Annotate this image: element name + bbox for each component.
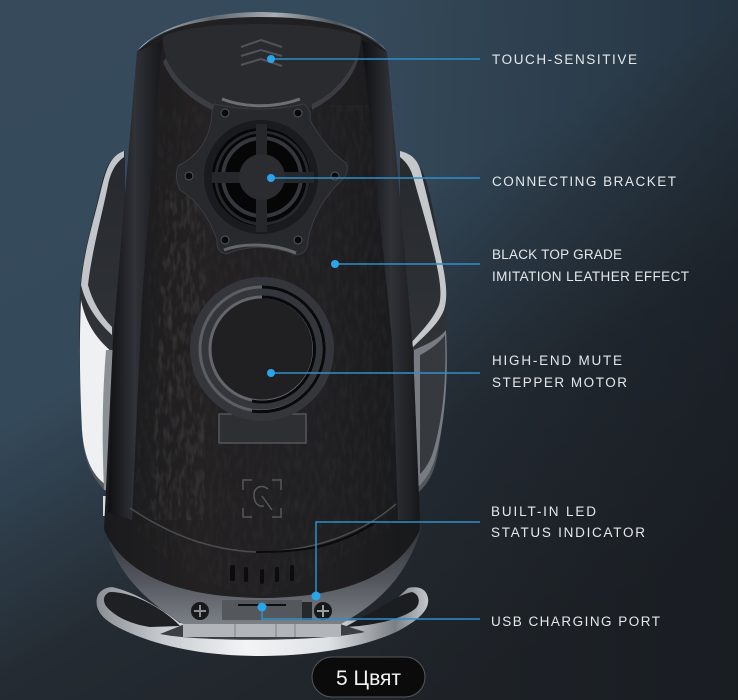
right clamp arm <box>400 151 447 497</box>
main body <box>104 12 420 598</box>
callout: connecting bracket <box>267 174 480 182</box>
left screw <box>191 602 209 620</box>
label: imitation leather effect: BLACK TOP GRADE <box>492 247 622 262</box>
rim under body <box>105 520 421 624</box>
face scan icon <box>243 480 281 517</box>
label: stepper motor: STEPPER MOTOR <box>492 375 627 390</box>
left base pad <box>104 592 180 627</box>
base centre buttons <box>183 624 341 637</box>
label: LED indicator <box>491 504 645 540</box>
stepper motor stand <box>219 414 306 443</box>
silver base tray <box>97 520 428 656</box>
base dark gap <box>160 624 365 640</box>
callout: imitation leather <box>331 260 480 268</box>
phone holder device <box>79 12 447 656</box>
callout lines <box>258 55 480 619</box>
label: connecting bracket: CONNECTING BRACKET <box>492 174 676 189</box>
callout: USB port <box>258 602 480 619</box>
callout: stepper motor <box>267 369 480 377</box>
connecting bracket <box>176 99 347 255</box>
top touch panel <box>163 24 361 108</box>
label: stepper motor: HIGH-END MUTE <box>492 353 622 368</box>
label: stepper motor <box>492 353 627 390</box>
leather texture <box>133 105 395 595</box>
stepper motor dial <box>190 277 334 421</box>
right screw <box>314 602 332 620</box>
label: LED indicator: BUILT-IN LED <box>491 504 596 519</box>
colour count badge: 5 Цвят <box>336 667 401 690</box>
USB port area <box>222 600 312 620</box>
vent slots <box>230 565 294 584</box>
touch chevrons icon <box>241 40 282 66</box>
top chrome edge <box>138 12 386 50</box>
label: touch-sensitive: TOUCH-SENSITIVE <box>492 52 637 67</box>
right side rail <box>362 40 420 520</box>
right base pad <box>345 592 419 627</box>
callout: touch-sensitive <box>267 55 480 63</box>
colour count badge <box>312 657 425 697</box>
lower body seam <box>130 504 396 552</box>
leather highlight strip <box>150 190 205 520</box>
label: imitation leather effect <box>492 247 689 284</box>
label: imitation leather effect: IMITATION LEATHER EFFECT <box>492 269 689 284</box>
label: LED indicator: STATUS INDICATOR <box>491 525 645 540</box>
left side rail <box>108 40 162 520</box>
callout: LED indicator <box>312 522 480 600</box>
label: USB charging port: USB CHARGING PORT <box>491 614 660 629</box>
left clamp arm <box>79 151 125 516</box>
